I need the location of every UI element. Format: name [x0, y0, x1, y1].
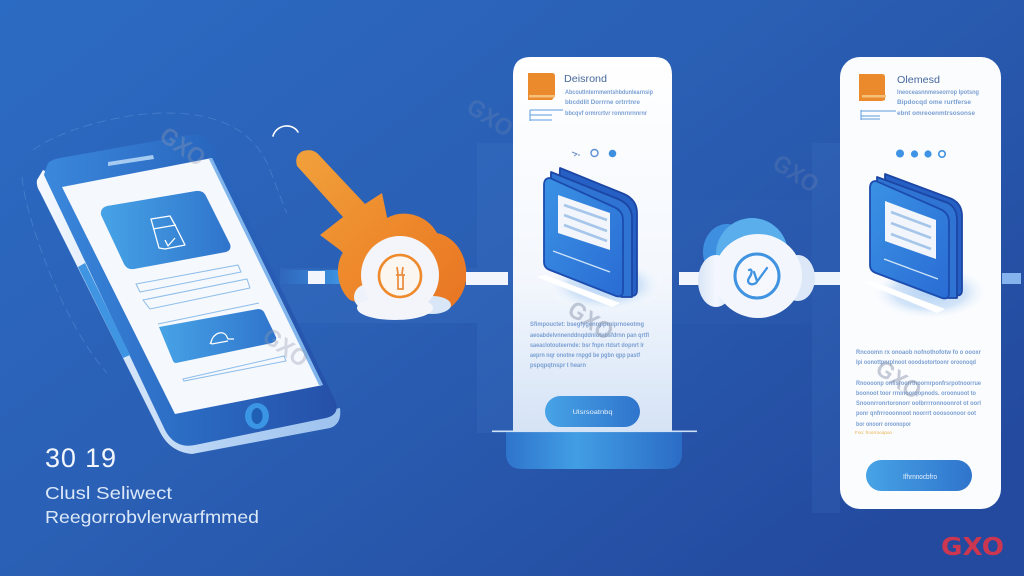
icon: clipboard [151, 216, 185, 249]
icon: check ring [735, 254, 779, 298]
card button [545, 396, 640, 427]
phone screen [62, 158, 323, 414]
icon: blue document [870, 174, 962, 298]
card body text [856, 349, 981, 428]
icon: list lines [861, 110, 896, 120]
card button: Ifhrnnocbfro [903, 474, 937, 481]
card body text: Ipi oonottpnrplnoot ooodsotortoonr oroonoqd [856, 359, 976, 366]
phone side accent [78, 263, 130, 358]
light streak [864, 281, 945, 313]
card button [866, 460, 972, 491]
card body text: Rnoooonp onfisroorrthoornrponfrsrpotnoorrue [856, 380, 981, 387]
card heading: Olemesd [897, 75, 940, 86]
connector: orange cloud to card [466, 272, 508, 285]
icon: small bell [210, 333, 234, 344]
shadow under document [545, 257, 665, 313]
watermarks [155, 93, 927, 404]
watermarks: GXO [871, 354, 927, 404]
card body text: bor onoorr oroonopor [856, 421, 911, 428]
faint background bands [280, 143, 840, 513]
screen lower card [159, 309, 276, 363]
card body text: Snoonrronrtoronorr oolbrrrronnoonrot ot oorl [856, 400, 981, 407]
icon: list lines [530, 110, 563, 121]
connector: card to blue cloud [679, 272, 724, 285]
icon: orange folder [528, 73, 555, 100]
watermarks: GXO [768, 149, 824, 198]
connector: blue cloud to second card [805, 272, 840, 285]
card body text: Rncoomn rx onoaob nofnothofotw fo o oooxr [856, 349, 981, 356]
card header text: bbcddlit Dorrrne ortrrtnre [565, 99, 640, 106]
card body text: aeoabdelvnnenddnqddnlotnbsfdrnn pan qrtfl [530, 332, 649, 339]
speaker [108, 155, 154, 166]
card header text: Abcoutlnternmentshbdunlearnsip [565, 89, 653, 96]
left caption: Clusl Seliwect [45, 483, 172, 503]
pagination dots [896, 150, 945, 158]
watermarks: GXO [462, 93, 518, 142]
small arc icon [273, 126, 298, 136]
left caption: Reegorrobvlerwarfmmed [45, 507, 259, 527]
small orange note: Foo: froorrooopoo [855, 430, 893, 435]
home button [245, 403, 269, 429]
icon: orange ring with glyph [379, 255, 421, 297]
panel: first card [513, 57, 672, 432]
pagination marks [572, 150, 616, 157]
screen form lines [136, 265, 286, 381]
card header text: Bipdocqd ome rurtferse [897, 99, 971, 106]
orange cloud [338, 214, 466, 320]
light streak [537, 275, 620, 307]
card body text: aeprn nqr onotne rnpgd be pgbn qpp pastf [530, 352, 641, 359]
phone outer edge [37, 170, 340, 454]
left stat number: 30 19 [45, 443, 116, 473]
connector: phone to orange cloud [278, 270, 343, 284]
phone illustration [37, 135, 340, 454]
card body text: boonoot toor rrninoorqopnods. oroonuoot to [856, 390, 976, 397]
card body text: Sfimpouctet: bsegfygenrgiprniprnoeotmg [530, 321, 644, 328]
watermarks: GXO [258, 322, 314, 372]
shadow under document [870, 264, 990, 320]
left caption [45, 483, 259, 527]
right bevel [209, 158, 323, 385]
tray under first card [492, 430, 697, 469]
card header text [897, 89, 979, 117]
watermarks: GXO [563, 295, 619, 345]
card body text: ponr qnfrrrooonnoot noorrrt ooosoonoor oot [856, 410, 977, 417]
logo: GXO: GXO [941, 532, 1004, 561]
card body text [530, 321, 649, 369]
screen top card [101, 191, 230, 269]
card header text: bbcqvf ormrcrtvr ronnrnrnnrnr [565, 110, 647, 117]
card header text: ebnt omreoenmtrsosonse [897, 110, 975, 117]
panel: second card [840, 57, 1001, 509]
card button: Ulsrsoatnbq [572, 409, 613, 416]
card header text: Ineoceasnnmeseorrop Ipotsng [897, 89, 979, 96]
connector: second card outgoing [1002, 273, 1021, 284]
dashed orbit around phone [22, 113, 287, 373]
card header text [565, 89, 653, 117]
card heading: Deisrond [564, 74, 607, 85]
card body text: saeaclotouteernde: bsr fnpn rtdsrt dopnrt lr [530, 342, 644, 349]
icon: blue document [544, 168, 637, 297]
icon: orange folder [859, 74, 886, 101]
phone body [44, 135, 337, 446]
watermarks: GXO [155, 121, 211, 171]
orange arrow [296, 150, 388, 262]
blue cloud [698, 218, 815, 318]
card body text: pspqpqtnspr t hearn [530, 362, 586, 369]
